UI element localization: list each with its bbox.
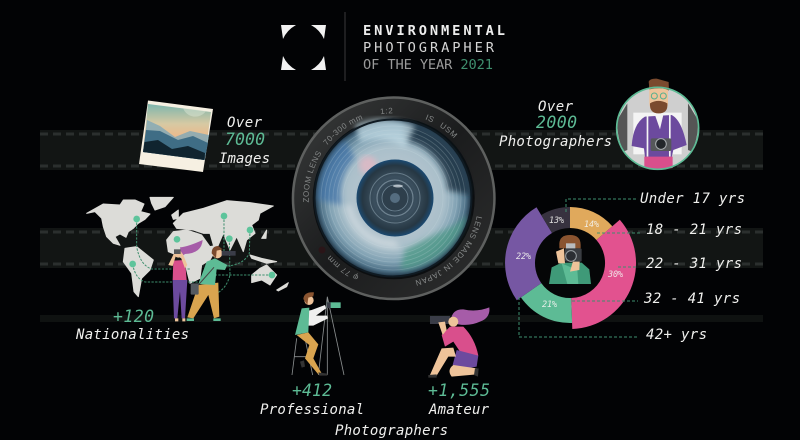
stat: professional: +412 [292,381,332,400]
stat: photographers: Over [538,99,574,115]
stat: amateur: Amateur [428,402,490,418]
stat: professional [260,381,364,418]
percent labels: 13% [549,216,564,226]
polaroid photo [139,100,213,172]
photo moon [183,108,206,117]
lens engraving: ZOOM LENS [303,151,321,202]
stat: amateur [428,381,490,418]
man [187,283,219,318]
professional photographer figure [292,292,344,376]
age labels: 22 - 31 yrs [646,256,742,272]
lens engraving: φ 77 mm [328,256,358,280]
stat: nationalities: Nationalities [75,327,189,343]
camera lens [292,96,496,300]
age labels: 42+ yrs [646,327,707,343]
age labels: Under 17 yrs [640,191,745,207]
lens engraving: IS [426,114,434,122]
percent labels: 14% [584,220,599,230]
percent labels: 22% [516,252,531,262]
percent labels: 30% [607,270,623,280]
lens engraving [303,108,482,286]
lens engraving: 70-300 mm [323,116,362,144]
amateur photographer figure [428,307,489,378]
lens engraving: LENS MADE IN JAPAN [416,216,482,286]
percent labels [516,216,623,310]
slice: 32-41 [505,207,552,300]
donut center photographer icon [549,235,591,284]
film strip: top [40,130,763,170]
film strip: bottom [40,315,763,322]
leader line: 22-31 [618,266,638,268]
title: PHOTOGRAPHER [363,40,495,56]
photographers caption: Photographers [335,423,448,439]
photographer portrait [617,79,699,169]
slice: 18-21 [571,220,636,329]
logo divider [344,12,346,81]
stat: photographers [499,99,612,150]
stat: images: 7000 [225,130,265,149]
stat: amateur: +1,555 [428,381,490,400]
logo mark [281,25,326,70]
man [632,115,687,157]
leader line: under 17 [566,199,638,212]
age labels: 18 - 21 yrs [646,222,742,238]
title: ENVIRONMENTAL [363,23,505,39]
stat: nationalities [75,307,189,343]
age labels: 32 - 41 yrs [643,291,740,307]
two photographers on map [168,240,236,321]
stat: professional: Professional [260,402,364,418]
age labels [640,191,745,343]
map connection lines [133,216,272,293]
lens engraving: USM [440,122,458,138]
leader line: 18-21 [597,232,640,234]
woman [180,240,203,257]
slice: 42+ [541,207,570,233]
film strip: middle [40,228,763,268]
slice: under 17 [570,207,612,240]
title: OF THE YEAR 2021 [363,57,493,73]
world map [87,197,288,297]
leader line: 42+ [519,297,638,337]
title [363,23,505,73]
percent labels: 21% [542,300,557,310]
stat: images: Over [227,115,263,131]
stat: nationalities: +120 [113,307,154,326]
stat: images: Images [219,151,270,167]
slice: 22-31 [521,283,572,323]
stat: photographers: 2000 [536,113,577,132]
stat: images [219,115,270,167]
stat: photographers: Photographers [499,134,612,150]
lens glass [314,119,472,276]
leader line: 32-41 [572,300,638,302]
donut chart: age groups [505,207,636,329]
